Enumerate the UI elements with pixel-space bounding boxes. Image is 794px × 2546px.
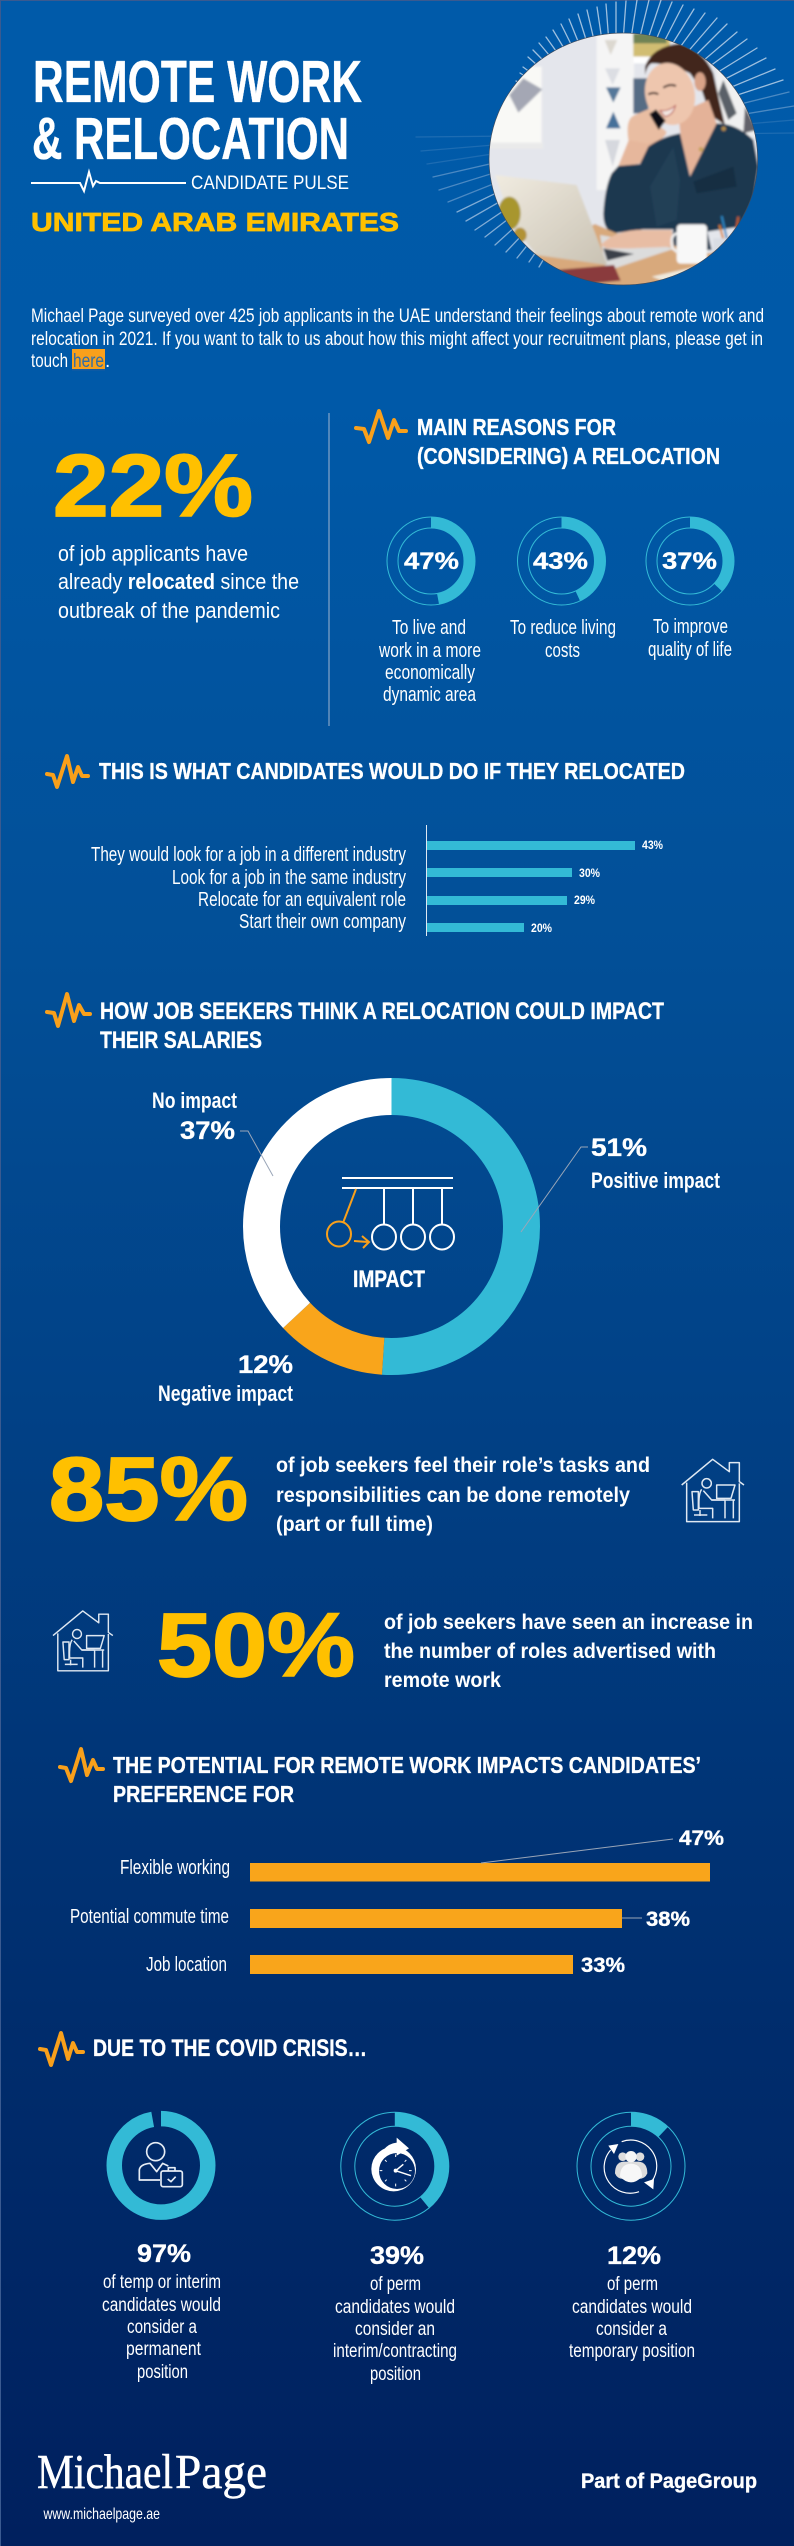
stat: 22% relocated: outbreak of the pandemic — [58, 598, 280, 623]
stat: 22% relocated: already relocated since the — [58, 569, 299, 594]
neck and chest — [678, 100, 718, 178]
stat: 85% remote: of job seekers feel their role’s tasks and — [276, 1454, 650, 1477]
icon: pulse — [40, 2033, 83, 2065]
donut chart: salary impact: Negative impact — [158, 1381, 294, 1406]
stat: 85% remote: responsibilities can be done remotely — [276, 1484, 630, 1507]
hair — [645, 43, 725, 125]
donut: 47% — [387, 517, 475, 605]
bar chart: preference: 47% — [679, 1827, 724, 1850]
country subtitle: UNITED ARAB EMIRATES — [31, 207, 399, 237]
donut labels: quality of life — [648, 639, 732, 661]
text: 12%: candidates would — [572, 2297, 692, 2318]
bar chart: relocation actions: 43% — [642, 838, 663, 852]
bar chart: relocation actions: Look for a job in the same industry — [172, 867, 406, 889]
icon: person with briefcase — [139, 2143, 182, 2187]
icon: people with rotating arrows — [604, 2140, 657, 2193]
icon: pulse — [47, 756, 88, 787]
donut labels: economically — [385, 662, 475, 684]
icon: pulse — [60, 1749, 103, 1781]
icon: home office — [53, 1611, 113, 1671]
forearm and hand — [617, 132, 667, 168]
heading: remote work preference: THE POTENTIAL FOR REMOTE WORK IMPACTS CANDIDATES’ — [113, 1752, 701, 1778]
text: 12% — [569, 2242, 695, 2362]
part of PageGroup: Part of PageGroup — [581, 2470, 757, 2493]
donut labels: work in a more — [378, 640, 481, 662]
donut labels — [378, 616, 732, 706]
bar chart: relocation actions: Start their own company — [239, 911, 406, 933]
website: www.michaelpage.ae — [43, 2506, 160, 2523]
text: 97%: 97% — [137, 2240, 191, 2268]
stat: 85% remote: (part or full time) — [276, 1513, 433, 1536]
bar chart: relocation actions: Relocate for an equivalent role — [198, 889, 406, 911]
donut: 37% — [646, 517, 734, 605]
icon: clock with arrow — [371, 2138, 416, 2191]
heading: covid crisis: DUE TO THE COVID CRISIS… — [93, 2035, 367, 2062]
laptop lid — [495, 175, 607, 265]
photo: woman on phone at laptop — [483, 30, 763, 290]
notebook — [556, 265, 621, 286]
heading: salary impact — [100, 998, 664, 1054]
bar chart: preference: Job location — [146, 1954, 227, 1976]
donut: 97% with person icon — [114, 2119, 208, 2212]
intro text: touch — [31, 351, 68, 372]
text: 39%: consider an — [355, 2319, 435, 2340]
intro text: here — [73, 351, 104, 372]
candidate pulse line and label — [31, 172, 349, 194]
bar chart: relocation actions: They would look for a job in a different industry — [91, 844, 406, 866]
text: 97%: position — [137, 2362, 188, 2383]
pens — [722, 216, 727, 241]
text: 97% — [102, 2240, 221, 2383]
text: 97%: permanent — [126, 2339, 202, 2360]
stat: 22% relocated — [53, 436, 299, 623]
donut chart: salary impact: 12% — [238, 1351, 293, 1379]
icon: newton's cradle — [327, 1178, 454, 1250]
bar chart: relocation actions: 29% — [574, 893, 595, 907]
donut chart: salary impact: No impact — [152, 1088, 238, 1113]
text: 12%: consider a — [596, 2319, 667, 2340]
header rays — [416, 0, 794, 267]
shirt — [603, 123, 758, 250]
logo: Michael Page: Michael — [37, 2444, 173, 2499]
text: 39%: candidates would — [335, 2297, 455, 2318]
donut labels: To live and — [392, 617, 466, 639]
text: 97%: candidates would — [102, 2295, 221, 2316]
bar chart: preference — [70, 1827, 724, 1977]
title — [32, 49, 362, 172]
donut labels: To improve — [653, 616, 728, 638]
heading: main reasons — [417, 414, 720, 469]
stat: 85% remote: 85% — [49, 1440, 248, 1540]
bar chart: relocation actions — [91, 825, 663, 936]
text: 39%: 39% — [370, 2242, 424, 2270]
text: 97%: consider a — [127, 2317, 197, 2338]
donut: 12% with people icon — [577, 2112, 685, 2220]
intro text: . — [105, 351, 110, 372]
donut labels: dynamic area — [383, 684, 477, 706]
heading: what candidates would do: THIS IS WHAT CANDIDATES WOULD DO IF THEY RELOCATED — [99, 758, 685, 784]
bar chart: preference: Flexible working — [120, 1857, 230, 1879]
text: 12%: of perm — [607, 2274, 658, 2295]
mug — [677, 224, 707, 264]
donut chart: salary impact: 51% — [591, 1134, 647, 1162]
heading: main reasons: MAIN REASONS FOR — [417, 414, 616, 440]
stat: 50% roles: 50% — [157, 1596, 355, 1696]
stat: 50% roles: remote work — [384, 1669, 501, 1692]
text: 12%: temporary position — [569, 2341, 695, 2362]
title: REMOTE WORK — [33, 49, 362, 115]
icon: pulse — [47, 994, 90, 1026]
text: 39%: interim/contracting — [333, 2341, 457, 2362]
heading: main reasons: (CONSIDERING) A RELOCATION — [417, 443, 720, 469]
donut: 47%: 47% — [404, 548, 459, 575]
donut: 37%: 37% — [662, 548, 717, 575]
laptop base — [600, 235, 675, 269]
icon: pulse — [356, 411, 406, 442]
bar chart: preference: 38% — [646, 1908, 690, 1931]
stat: 22% relocated: of job applicants have — [58, 541, 248, 566]
donut: 39% with clock icon — [341, 2112, 449, 2220]
logo: Michael Page: Page — [175, 2444, 267, 2499]
donut labels: To reduce living — [510, 617, 616, 639]
desk — [535, 223, 715, 285]
stat: 50% roles: the number of roles advertised with — [384, 1640, 716, 1663]
donut chart: salary impact: 37% — [180, 1117, 235, 1145]
donut: 43%: 43% — [533, 548, 588, 575]
stat: 85% remote — [49, 1440, 650, 1540]
icon: home office — [682, 1459, 744, 1522]
candidate pulse line and label: CANDIDATE PULSE — [191, 173, 349, 194]
heading: remote work preference — [113, 1752, 701, 1807]
logo: Michael Page — [37, 2444, 267, 2499]
donut centre label: IMPACT — [353, 1266, 425, 1293]
text: 97%: of temp or interim — [103, 2272, 221, 2293]
text: 39%: position — [370, 2364, 421, 2385]
donut labels: costs — [545, 640, 580, 662]
heading: salary impact: THEIR SALARIES — [100, 1027, 262, 1054]
face — [643, 61, 696, 126]
donut chart: salary impact: Positive impact — [591, 1168, 721, 1193]
heading: salary impact: HOW JOB SEEKERS THINK A RELOCATION COULD IMPACT — [100, 998, 664, 1025]
donut chart: salary impact — [152, 1088, 721, 1406]
stat: 22% relocated: 22% — [53, 436, 253, 535]
bar chart: relocation actions: 20% — [531, 921, 552, 935]
plant — [498, 197, 521, 230]
bar chart: preference: 33% — [581, 1954, 625, 1977]
stat: 50% roles: of job seekers have seen an increase in — [384, 1611, 753, 1634]
heading: remote work preference: PREFERENCE FOR — [113, 1781, 294, 1807]
donut: 43% — [518, 517, 606, 605]
bar chart: preference: Potential commute time — [70, 1906, 229, 1928]
intro text — [31, 306, 764, 372]
stat: 50% roles — [157, 1596, 753, 1696]
text: 39%: of perm — [370, 2274, 421, 2295]
bar chart: relocation actions: 30% — [579, 866, 600, 880]
title: & RELOCATION — [32, 106, 349, 172]
text: 39% — [333, 2242, 457, 2385]
text: 12%: 12% — [607, 2242, 661, 2270]
